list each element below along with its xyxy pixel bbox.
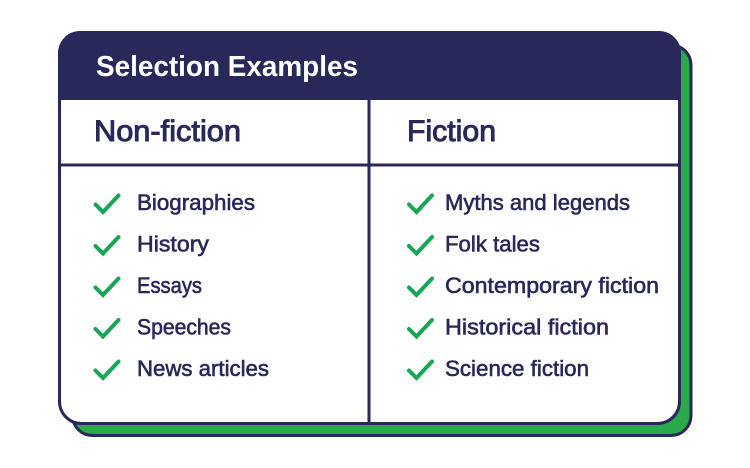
icon: check xyxy=(96,237,118,254)
icon: check xyxy=(409,320,432,336)
item: Myths and legends: Myths and legends xyxy=(445,190,630,215)
divider: columns xyxy=(368,100,370,423)
item: Speeches: Speeches xyxy=(137,314,231,340)
icon: check xyxy=(409,196,432,212)
item: Historical fiction: Historical fiction xyxy=(445,314,609,340)
item: Science fiction: Science fiction xyxy=(445,356,589,381)
icon: check xyxy=(96,362,118,378)
icon: check xyxy=(409,362,432,378)
green offset shadow card xyxy=(72,45,691,436)
item: Essays: Essays xyxy=(137,273,202,298)
item: History: History xyxy=(137,232,210,256)
panel: main card xyxy=(58,31,681,424)
divider: column header row xyxy=(60,164,679,166)
header bar xyxy=(58,31,681,100)
icon: check xyxy=(96,196,118,212)
item: Folk tales: Folk tales xyxy=(445,232,540,256)
icon: check xyxy=(96,278,118,295)
item: Biographies: Biographies xyxy=(137,190,255,215)
list: non-fiction xyxy=(96,190,269,381)
title: Selection Examples xyxy=(96,51,358,83)
icon: check xyxy=(96,320,118,336)
item: News articles: News articles xyxy=(137,356,269,381)
column heading: fiction: Fiction xyxy=(407,115,496,148)
icon: check xyxy=(409,237,432,254)
icon: check xyxy=(409,278,432,295)
column heading: non-fiction: Non-fiction xyxy=(94,115,241,148)
list: fiction xyxy=(409,190,659,381)
item: Contemporary fiction: Contemporary fiction xyxy=(445,273,659,298)
